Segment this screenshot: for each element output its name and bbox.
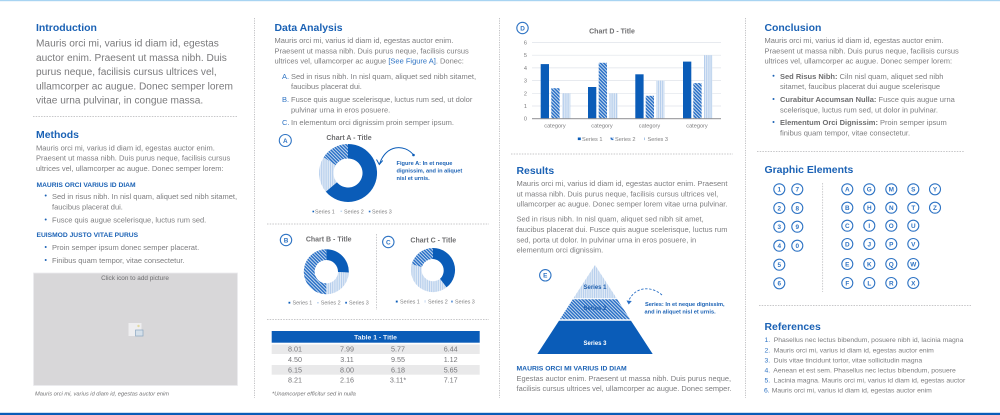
bar chart: 4 (524, 66, 527, 72)
legend: chart B (288, 301, 369, 307)
icons: letter badges: N (889, 205, 894, 212)
icons: letter badges: I (868, 223, 870, 230)
bullet list: conclusion: sitamet, faucibus placerat dui augue scelerisque (780, 82, 940, 91)
text block: results body: faucibus placerat dui. Fusce quis augue scelerisque, luctus rum (516, 225, 727, 234)
text block: results closing: facilisis cursus ultrices vel, ullamcorper ac augue. Donec semper. (516, 384, 731, 393)
table 1: 2.16 (340, 376, 354, 385)
table 1: 7.99 (340, 344, 354, 353)
icon: badge B (280, 234, 292, 246)
text block: data analysis body: [See Figure A]. Donec: (388, 56, 464, 66)
lettered list: B. (282, 95, 289, 104)
heading: data analysis: Data Analysis (274, 23, 343, 34)
callout: figure A: nisl et urnis. (396, 176, 430, 182)
table 1: 3.11 (340, 355, 354, 364)
reference list: Duis vitae tincidunt tortor, vitae sollicitudin magna (774, 358, 922, 365)
icons: letter badges: U (911, 223, 916, 230)
panel: data analysis (272, 23, 480, 398)
table 1: 5.65 (444, 365, 458, 374)
pyramid chart: Series 3 (583, 341, 607, 347)
icons: letter badges: F (845, 280, 849, 287)
table footnote: *Unamcorper efficitur sed in nulla (272, 392, 356, 398)
chart A: donut: Chart A - Title (326, 135, 372, 142)
heading: introduction: Introduction (36, 23, 97, 34)
heading: methods: Methods (36, 130, 79, 141)
bar chart: 3 (524, 79, 527, 85)
table 1: 7.17 (444, 376, 458, 385)
legend: chart B: Series 1 (292, 301, 312, 307)
icons: letter badges: O (889, 223, 894, 230)
bar chart: 5 (524, 53, 527, 59)
icons: number badges: 4 (778, 243, 782, 250)
bullet list: conclusion: Elementum Orci Dignissim: (780, 118, 878, 127)
lettered list: C. (282, 118, 290, 127)
text block: data analysis body: Praesent ut massa nibh. Duis purus neque, facilisis cursus (274, 46, 469, 55)
reference list: Mauris orci mi, varius id diam id, egestas auctor enim (772, 388, 932, 395)
table 1: 5.77 (391, 344, 405, 353)
text block: methods body: Mauris orci mi, varius id diam id, egestas auctor enim. (36, 143, 215, 152)
text block: data analysis body: Mauris orci mi, varius id diam id, egestas auctor enim. (274, 36, 453, 45)
icons: number badges: 0 (796, 243, 800, 250)
legend: chart D: Series 1 (582, 137, 603, 143)
subheading: mauris orci mi: MAURIS ORCI MI VARIUS ID DIAM (516, 366, 627, 372)
reference list: 5. (764, 377, 770, 384)
icon: badge C: C (386, 239, 391, 246)
bullet list: first (45, 192, 237, 224)
text block: results body: sed, porta ut dolor. In pulvinar urna in eros posuere, in (516, 235, 696, 244)
table 1: 8.21 (288, 376, 302, 385)
icon: badge D: D (520, 25, 525, 32)
icons: number badges: 2 (778, 205, 782, 212)
legend: chart A: Series 1 (315, 210, 335, 216)
icons: number badges: 5 (778, 262, 782, 269)
lettered list: faucibus placerat dui. (291, 82, 362, 91)
panel: introduction (36, 23, 233, 107)
bar chart (524, 40, 721, 130)
subheading: mauris orci: MAURIS ORCI VARIUS ID DIAM (36, 182, 136, 189)
text block: conclusion body: Mauris orci mi, varius id diam id, egestas auctor enim. (764, 36, 943, 45)
bullet list: conclusion: scelerisque, luctus rum sed, ut dolor in pulvinar. (780, 105, 938, 114)
bullet list: first: faucibus placerat dui. (52, 202, 123, 211)
legend: chart A (312, 210, 392, 216)
bullet list: conclusion (772, 72, 956, 137)
legend: chart D: Series 2 (615, 137, 636, 143)
text block: introduction body: Mauris orci mi, varius id diam id, egestas (36, 38, 219, 50)
icons: letter badges: T (911, 205, 915, 212)
panel: references (764, 322, 966, 395)
reference list: 4. (764, 367, 770, 374)
text block: conclusion body: ultrices vel, ullamcorper ac augue. Donec semper lorem: (764, 56, 952, 66)
icons: number badges: 1 (778, 187, 782, 194)
bottom accent bar (0, 413, 1000, 415)
text block: introduction body: vitae urna pulvinar, in congue massa. (36, 96, 203, 107)
chart B: donut: Chart B - Title (306, 236, 352, 244)
text block: results body: Mauris orci mi, varius id diam id, egestas auctor enim. Praesent (516, 179, 728, 188)
pyramid chart: Series 2 (583, 306, 607, 312)
icons: letter badges: C (845, 223, 850, 230)
icon: badge A: A (283, 138, 288, 145)
icon: badge C (383, 236, 394, 248)
icon: badge E (540, 270, 551, 281)
panel: graphic elements (764, 165, 940, 289)
bullet list: conclusion: finibus quam tempor, vitae consectetur. (780, 128, 910, 137)
bullet list: second: Finibus quam tempor, vitae consectetur. (52, 256, 185, 265)
legend: chart C: Series 2 (428, 300, 448, 306)
lettered list: Fusce quis augue scelerisque, luctus rum sed, ut dolor (291, 95, 473, 104)
bar chart: 2 (524, 91, 527, 97)
icons: letter badges: E (845, 261, 850, 268)
icons: letter badges: Y (933, 187, 938, 194)
reference list (764, 337, 966, 395)
icons: letter badges: X (911, 280, 916, 287)
arrow: pyramid callout (626, 289, 662, 304)
icon: badge B: B (284, 237, 289, 244)
lettered list: Sed in risus nibh. In nisl quam, aliquet sed nibh sitamet, (291, 72, 476, 81)
icons: letter badges: Z (933, 205, 937, 212)
heading: results: Results (516, 166, 554, 177)
icons: letter badges: P (889, 241, 894, 248)
panel: conclusion (764, 23, 959, 137)
icons: letter badges: K (867, 261, 872, 268)
icons: letter badges: G (867, 187, 872, 194)
chart title: Chart D - Title (589, 28, 635, 36)
legend: chart C: Series 1 (400, 300, 420, 306)
table 1: 6.15 (288, 365, 302, 374)
table 1: 1.12 (444, 355, 458, 364)
bar chart: 1 (524, 104, 527, 110)
legend: chart D (578, 137, 668, 143)
text block: methods body: ultrices vel, ullamcorper ac augue. Donec semper lorem: (36, 164, 224, 173)
icons: letter badges: S (911, 187, 916, 194)
text block: results body: ut massa nibh. Duis purus neque, facilisis cursus ultrices vel, (516, 189, 718, 198)
legend: chart B: Series 2 (321, 301, 341, 307)
bullet list: conclusion: Curabitur Accumsan Nulla: (780, 95, 876, 104)
bar chart: category (639, 124, 660, 130)
table 1: 9.55 (391, 355, 405, 364)
callout: pyramid: Series: In et neque dignissim, (645, 302, 725, 308)
pyramid chart (537, 265, 653, 354)
bullet list: conclusion: Sed Risus Nibh: (780, 72, 838, 81)
picture placeholder (34, 273, 238, 386)
icons: letter badges: V (911, 241, 916, 248)
icons: number badges: 7 (796, 187, 800, 194)
text block: data analysis body: ultrices vel, ullamcorper ac augue (274, 56, 388, 66)
lettered list: In elementum orci dignissim proin semper ipsum. (291, 118, 454, 127)
bullet list: second (45, 243, 199, 265)
icons: letter badges: H (867, 205, 872, 212)
chart C: donut: Chart C - Title (410, 238, 456, 244)
bar chart: category (544, 124, 566, 130)
text block: introduction body: ullamcorper ac augue. Donec semper lorem (36, 81, 233, 92)
table 1 (272, 331, 480, 385)
bullet list: second: Proin semper ipsum donec semper placerat. (52, 243, 199, 252)
reference list: Phasellus nec lectus bibendum, posuere nibh id, lacinia magna (774, 337, 964, 344)
legend: chart C: Series 3 (455, 300, 475, 306)
legend: chart A: Series 3 (372, 210, 392, 216)
icons: number badges (774, 184, 803, 289)
icons: number badges: 6 (778, 281, 782, 288)
picture placeholder: Click icon to add picture (101, 275, 169, 282)
icons: letter badges: W (910, 261, 917, 268)
bullet list: first: Fusce quis augue scelerisque, luctus rum sed. (52, 216, 206, 224)
lettered list: A. (282, 72, 289, 81)
chart B: donut (288, 236, 369, 307)
panel: methods (34, 130, 238, 398)
legend: chart C (396, 300, 475, 306)
icons: number badges: 3 (778, 224, 782, 231)
table 1: 4.50 (288, 355, 302, 364)
bar chart: category (686, 124, 708, 130)
text block: results body: elementum orci dignissim. (516, 245, 603, 254)
heading: conclusion: Conclusion (764, 23, 821, 34)
text block: introduction body: purus neque, facilisis cursus ultrices vel, (36, 67, 217, 78)
top accent bar (0, 0, 1000, 1)
bar chart: 0 (524, 117, 527, 123)
lettered list (282, 72, 476, 127)
table 1: 6.18 (391, 365, 405, 374)
heading: references: References (764, 322, 821, 333)
panel: chart D (517, 22, 721, 143)
table 1: 8.01 (288, 344, 302, 353)
reference list: 2. (764, 347, 770, 354)
icon: badge A (279, 134, 291, 146)
callout: figure A: dignissim, and in aliquet (396, 169, 462, 175)
arrow: figure A (376, 148, 414, 164)
icons: letter badges: R (889, 280, 894, 287)
icons: letter badges: D (845, 241, 850, 248)
bullet list: first: Sed in risus nibh. In nisl quam, aliquet sed nibh sitamet, (52, 192, 237, 201)
bar chart: category (591, 124, 613, 130)
icons: letter badges (842, 184, 940, 288)
icon: picture (128, 323, 143, 336)
reference list: Mauris orci mi, varius id diam id, egestas auctor enim (774, 347, 934, 354)
subheading: euismod: EUISMOD JUSTO VITAE PURUS (36, 232, 139, 239)
pyramid chart: Series 1 (583, 285, 607, 291)
reference list: 1. (764, 337, 770, 344)
bar chart: 6 (524, 40, 527, 46)
reference list: 3. (764, 358, 770, 365)
icons: letter badges: Q (889, 261, 894, 268)
legend: chart D: Series 3 (648, 137, 668, 143)
text block: conclusion body: Praesent ut massa nibh. Duis purus neque, facilisis cursus (764, 46, 959, 55)
text block: results body: Sed in risus nibh. In nisl quam, aliquet sed nibh sit amet, (516, 215, 704, 224)
callout: figure A: Figure A: In et neque (396, 161, 452, 167)
callout: pyramid: and in aliquet nisl et urnis. (644, 310, 716, 316)
table 1: 6.44 (444, 344, 458, 353)
text block: results body: ullamcorper ac augue. Donec semper lorem vitae urna pulvinar. (516, 200, 727, 209)
heading: graphic elements: Graphic Elements (764, 165, 853, 176)
chart C: donut (396, 238, 475, 306)
icons: number badges: 8 (796, 205, 800, 212)
legend: chart B: Series 3 (349, 301, 369, 307)
chart A: donut (312, 135, 392, 216)
icons: letter badges: B (845, 205, 850, 212)
bullet list: conclusion: Proin semper ipsum (878, 118, 947, 127)
icon: badge D (517, 22, 528, 34)
icons: letter badges: M (889, 187, 894, 194)
text block: results closing: Egestas auctor enim. Praesent ut massa nibh. Duis purus neque, (516, 374, 731, 383)
lettered list: pulvinar urna in eros posuere. (291, 105, 390, 114)
reference list: Aenean et est sem. Phasellus nec lectus bibendum, posuere (773, 367, 956, 374)
panel: results (516, 166, 731, 393)
table 1: 3.11* (390, 376, 406, 385)
table 1: 8.00 (340, 365, 354, 374)
icons: letter badges: A (845, 187, 850, 194)
icon: badge E: E (543, 273, 548, 280)
bullet list: conclusion: Ciln nisl quam, aliquet sed nibh (838, 72, 943, 81)
picture caption: Mauris orci mi, varius id diam id, egestas auctor enim (35, 392, 169, 398)
icons: letter badges: J (868, 241, 872, 248)
text block: introduction body: auctor enim. Praesent ut massa nibh. Duis (36, 53, 227, 64)
icons: number badges: 9 (796, 224, 800, 231)
text block: methods body: Praesent ut massa nibh. Duis purus neque, facilisis cursus (36, 154, 231, 162)
table 1: Table 1 - Title (354, 334, 397, 341)
bullet list: conclusion: Fusce quis augue urna (876, 95, 956, 104)
reference list: Lacinia magna. Mauris orci mi, varius id diam id, egestas auctor (774, 377, 966, 384)
icons: letter badges: L (867, 280, 871, 287)
reference list: 6. (764, 388, 770, 395)
legend: chart A: Series 2 (344, 210, 364, 216)
